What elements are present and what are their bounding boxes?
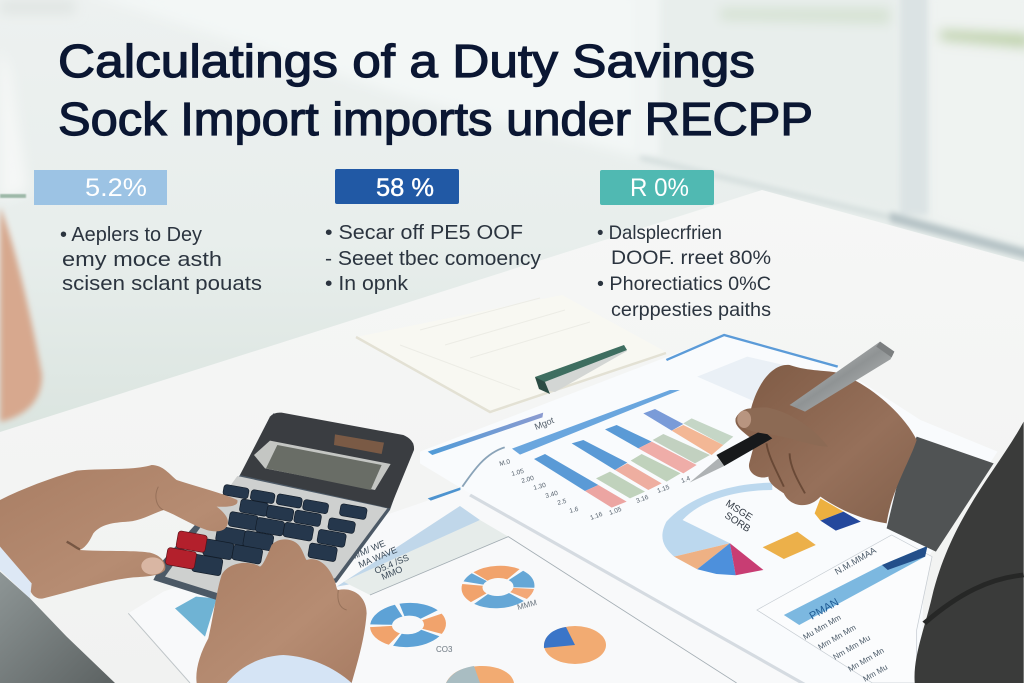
suit <box>915 422 1024 683</box>
calculator underside <box>153 413 413 600</box>
data sheet labels: Nm Mm Mu <box>832 633 872 662</box>
bullets: column 2: • Secar off PE5 OOF <box>325 222 523 244</box>
badge: 58 % <box>335 169 459 204</box>
donut table labels: MA WAVE <box>357 545 399 570</box>
data sheet labels: PMAN <box>808 596 841 623</box>
header band <box>512 390 680 455</box>
donut table labels <box>349 538 410 582</box>
donut table labels: O5.4 /SS <box>373 552 410 576</box>
data sheet labels: Mu Mm Mm <box>802 613 843 642</box>
badge: R 0% <box>600 170 714 205</box>
pie chart <box>662 483 861 575</box>
writing hand and pen <box>690 342 1024 683</box>
chart captions <box>436 598 538 654</box>
bar group 3 <box>605 425 710 473</box>
calculator keys <box>191 484 367 576</box>
donut table labels: M/M/ WE <box>349 538 387 562</box>
document: bar chart report <box>420 335 998 683</box>
bullets: column 2: • In opnk <box>325 273 409 295</box>
calculator display <box>254 441 391 490</box>
bullets: column 1: scisen sclant pouats <box>62 273 262 295</box>
thumb <box>736 407 828 447</box>
bullets: column 2: - Seeet tbec comoency <box>325 248 541 270</box>
title: Sock Import imports under RECPP <box>58 93 813 145</box>
data sheet labels: N.M.MMAA <box>833 545 878 577</box>
lower-right data sheet <box>757 535 932 683</box>
chart labels <box>499 415 754 535</box>
chart labels: 2.5 <box>557 498 568 507</box>
table surface <box>0 190 1024 683</box>
bullets: column 1: emy moce asth <box>62 249 222 271</box>
title <box>58 35 813 145</box>
hand <box>735 365 917 523</box>
data sheet labels <box>802 545 889 683</box>
bullets: column 1 <box>60 224 262 295</box>
data sheet labels: Mn Mm Mn <box>846 646 886 674</box>
chart labels: 1.4 <box>680 475 692 485</box>
chart labels: 1.15 <box>656 484 671 495</box>
badge: 5.2%: 5.2% <box>85 174 147 202</box>
calculator body <box>165 476 387 593</box>
column 1 <box>34 170 262 295</box>
chart labels: 3.16 <box>635 494 650 505</box>
donut chart 1 <box>471 571 525 603</box>
left suit sleeve and cuff <box>0 547 115 683</box>
chart labels: SORB <box>722 510 752 535</box>
chart captions: CO3 <box>436 645 453 654</box>
bar group 1 <box>534 454 645 508</box>
bullets: column 1: • Aeplers to Dey <box>60 224 202 246</box>
badge: 58 %: 58 % <box>376 174 434 202</box>
data sheet labels: Mm Mn Mm <box>816 623 858 652</box>
notebook with pen <box>356 295 666 413</box>
bullets: column 2 <box>325 222 541 295</box>
column 2 <box>325 169 541 295</box>
right hand over calculator <box>196 539 367 683</box>
chart labels: MSGE <box>723 498 754 524</box>
bullets: column 3: • Phorectiatics 0%C <box>597 273 771 295</box>
donut chart 4 <box>446 666 514 683</box>
header strips <box>428 413 543 455</box>
donut chart 2 <box>380 608 436 642</box>
bullets: column 3: DOOF. rreet 80% <box>611 247 771 269</box>
chart labels: 1.30 <box>533 482 547 492</box>
chart labels: 1.05 <box>511 468 525 478</box>
document: donut chart report <box>128 488 830 683</box>
chart labels: 2.00 <box>521 475 535 485</box>
bullets: column 3 <box>597 222 771 321</box>
chart labels: 3.40 <box>545 490 559 500</box>
pie chart 3 <box>544 626 606 664</box>
bullets: column 3: • Dalsplecrfrien <box>597 222 722 244</box>
calculator top panel <box>240 413 414 508</box>
bar group 4 <box>643 409 733 455</box>
bullets: column 3: cerppesties paiths <box>611 299 771 321</box>
left hand on keys <box>0 465 238 599</box>
calculator <box>153 413 414 600</box>
pen <box>790 342 894 412</box>
chart labels: M.0 <box>499 458 511 468</box>
badge: R 0%: R 0% <box>630 174 689 202</box>
chart captions: MMM <box>516 598 538 612</box>
red keys <box>165 531 208 569</box>
chart labels: Mgot <box>533 415 556 432</box>
chart labels: 1.6 <box>569 506 580 515</box>
chart labels: 1.05 <box>608 506 623 517</box>
left person blurred head <box>0 207 42 422</box>
donut table labels: MMO <box>380 564 404 582</box>
fine print block <box>697 357 820 407</box>
bar group 2 <box>572 440 681 490</box>
right hand shirt cuff <box>227 655 352 683</box>
title: Calculatings of a Duty Savings <box>58 35 755 87</box>
column 3 <box>597 170 771 321</box>
paper fold shadow <box>470 495 805 683</box>
sleeve <box>887 437 994 552</box>
badge: 5.2% <box>34 170 167 205</box>
chart labels: 1.16 <box>589 511 604 522</box>
bar chart <box>512 390 733 508</box>
